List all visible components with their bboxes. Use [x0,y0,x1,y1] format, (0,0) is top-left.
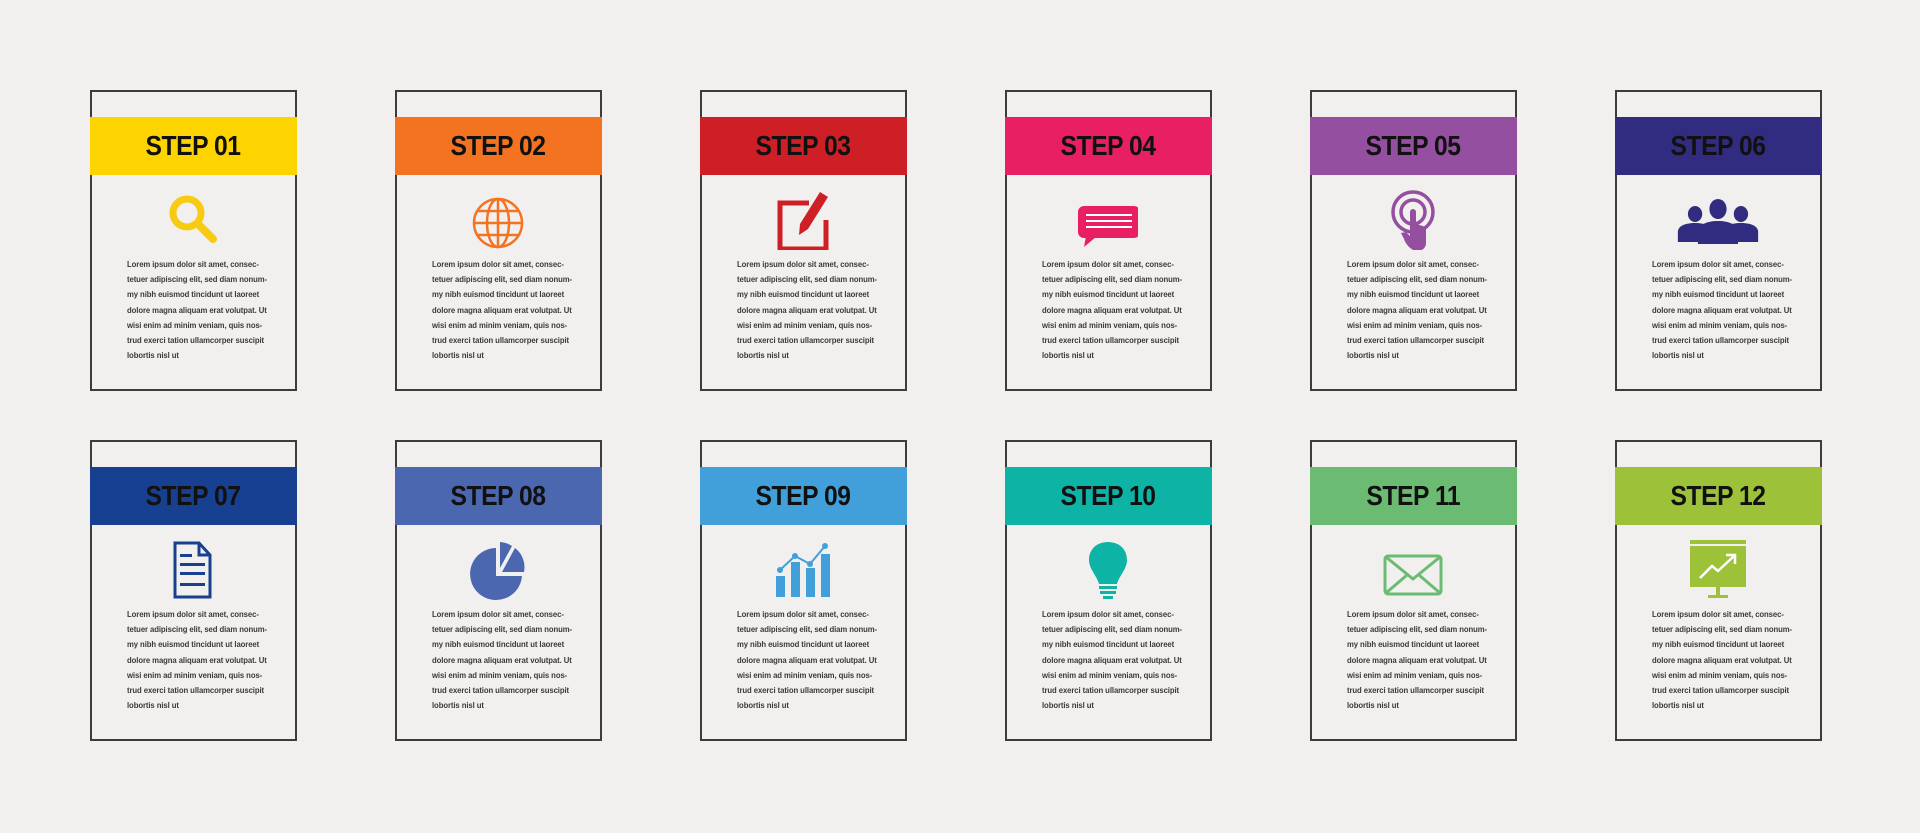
band: step 06 [1615,117,1822,175]
card: step 09 [700,440,907,741]
text block: my nibh euismod tincidunt ut laoreet [127,639,259,649]
text block: trud exerci tation ullamcorper suscipit [737,335,874,345]
text block: dolore magna aliquam erat volutpat. Ut [737,305,877,315]
card: step 03 [700,90,907,391]
icon: globe [472,198,524,248]
band: step 12: STEP 12 [1671,480,1766,511]
icon: bar chart [776,543,830,597]
card: step 08 [395,440,602,741]
band: step 12 [1615,467,1822,525]
text block: dolore magna aliquam erat volutpat. Ut [127,305,267,315]
text block: dolore magna aliquam erat volutpat. Ut [1347,305,1487,315]
text block: trud exerci tation ullamcorper suscipit [1042,685,1179,695]
text block: Lorem ipsum dolor sit amet, consec- [127,259,259,269]
band: step 01: STEP 01 [146,130,241,161]
text block: Lorem ipsum dolor sit amet, consec- [432,259,564,269]
text block: Lorem ipsum dolor sit amet, consec- [737,259,869,269]
text block: my nibh euismod tincidunt ut laoreet [1652,639,1784,649]
text block: lobortis nisl ut [127,350,179,360]
card: step 05 [1310,90,1517,391]
text block: lobortis nisl ut [1042,350,1094,360]
text block: dolore magna aliquam erat volutpat. Ut [1652,655,1792,665]
icon: touch [1391,190,1435,250]
text block: trud exerci tation ullamcorper suscipit [1347,335,1484,345]
text block: my nibh euismod tincidunt ut laoreet [432,639,564,649]
card: step 01 [90,90,297,391]
band: step 07: STEP 07 [146,480,241,511]
band: step 09 [700,467,907,525]
text block: my nibh euismod tincidunt ut laoreet [127,289,259,299]
text block: Lorem ipsum dolor sit amet, consec- [127,609,259,619]
text block: dolore magna aliquam erat volutpat. Ut [1042,655,1182,665]
card: step 11 [1310,440,1517,741]
text block: trud exerci tation ullamcorper suscipit [127,335,264,345]
text block: wisi enim ad minim veniam, quis nos- [127,670,262,680]
text block: wisi enim ad minim veniam, quis nos- [1042,320,1177,330]
text block: my nibh euismod tincidunt ut laoreet [432,289,564,299]
text block: wisi enim ad minim veniam, quis nos- [432,320,567,330]
text block: trud exerci tation ullamcorper suscipit [737,685,874,695]
band: step 02 [395,117,602,175]
icon: pie chart [470,542,524,600]
text block: Lorem ipsum dolor sit amet, consec- [1042,609,1174,619]
text block: lobortis nisl ut [1652,350,1704,360]
text block: Lorem ipsum dolor sit amet, consec- [1042,259,1174,269]
band: step 06: STEP 06 [1671,130,1766,161]
band: step 03: STEP 03 [756,130,851,161]
band: step 10: STEP 10 [1061,480,1156,511]
text block [1347,609,1487,710]
text block [432,609,572,710]
text block: Lorem ipsum dolor sit amet, consec- [1347,609,1479,619]
text block: Lorem ipsum dolor sit amet, consec- [737,609,869,619]
text block: lobortis nisl ut [1042,700,1094,710]
text block: tetuer adipiscing elit, sed diam nonum- [432,624,572,634]
text block [1042,609,1182,710]
text block [1042,259,1182,360]
text block: Lorem ipsum dolor sit amet, consec- [1652,609,1784,619]
text block: my nibh euismod tincidunt ut laoreet [1347,289,1479,299]
text block: wisi enim ad minim veniam, quis nos- [127,320,262,330]
text block: tetuer adipiscing elit, sed diam nonum- [737,274,877,284]
text block: lobortis nisl ut [1652,700,1704,710]
band: step 08: STEP 08 [451,480,546,511]
text block: lobortis nisl ut [127,700,179,710]
text block [127,609,267,710]
text block: my nibh euismod tincidunt ut laoreet [1652,289,1784,299]
text block: lobortis nisl ut [737,350,789,360]
card: step 10 [1005,440,1212,741]
text block [737,609,877,710]
text block: tetuer adipiscing elit, sed diam nonum- [1652,274,1792,284]
text block: Lorem ipsum dolor sit amet, consec- [1347,259,1479,269]
text block: wisi enim ad minim veniam, quis nos- [1652,320,1787,330]
band: step 09: STEP 09 [756,480,851,511]
band: step 02: STEP 02 [451,130,546,161]
text block: trud exerci tation ullamcorper suscipit [1652,685,1789,695]
text block: tetuer adipiscing elit, sed diam nonum- [1042,274,1182,284]
text block: wisi enim ad minim veniam, quis nos- [432,670,567,680]
band: step 03 [700,117,907,175]
text block: trud exerci tation ullamcorper suscipit [127,685,264,695]
text block [1652,609,1792,710]
text block: dolore magna aliquam erat volutpat. Ut [737,655,877,665]
card: step 07 [90,440,297,741]
text block: my nibh euismod tincidunt ut laoreet [1347,639,1479,649]
band: step 05: STEP 05 [1366,130,1461,161]
text block: lobortis nisl ut [432,350,484,360]
text block: dolore magna aliquam erat volutpat. Ut [1042,305,1182,315]
band: step 11: STEP 11 [1367,480,1460,511]
band: step 05 [1310,117,1517,175]
text block: tetuer adipiscing elit, sed diam nonum- [1347,624,1487,634]
text block: my nibh euismod tincidunt ut laoreet [737,639,869,649]
text block: my nibh euismod tincidunt ut laoreet [1042,289,1174,299]
text block: dolore magna aliquam erat volutpat. Ut [1347,655,1487,665]
text block: trud exerci tation ullamcorper suscipit [1042,335,1179,345]
text block: tetuer adipiscing elit, sed diam nonum- [127,624,267,634]
text block: tetuer adipiscing elit, sed diam nonum- [1347,274,1487,284]
text block [127,259,267,360]
text block: dolore magna aliquam erat volutpat. Ut [1652,305,1792,315]
text block: wisi enim ad minim veniam, quis nos- [737,670,872,680]
text block: trud exerci tation ullamcorper suscipit [432,335,569,345]
text block: trud exerci tation ullamcorper suscipit [432,685,569,695]
band: step 04: STEP 04 [1061,130,1156,161]
band: step 08 [395,467,602,525]
text block: my nibh euismod tincidunt ut laoreet [737,289,869,299]
text block: trud exerci tation ullamcorper suscipit [1652,335,1789,345]
text block: dolore magna aliquam erat volutpat. Ut [432,305,572,315]
text block: tetuer adipiscing elit, sed diam nonum- [432,274,572,284]
text block: wisi enim ad minim veniam, quis nos- [1042,670,1177,680]
text block: Lorem ipsum dolor sit amet, consec- [1652,259,1784,269]
icon: presentation board [1690,540,1746,598]
text block: dolore magna aliquam erat volutpat. Ut [432,655,572,665]
icon: team [1678,199,1758,244]
band: step 10 [1005,467,1212,525]
text block: my nibh euismod tincidunt ut laoreet [1042,639,1174,649]
text block: lobortis nisl ut [737,700,789,710]
text block [1347,259,1487,360]
band: step 07 [90,467,297,525]
text block: tetuer adipiscing elit, sed diam nonum- [1652,624,1792,634]
text block: tetuer adipiscing elit, sed diam nonum- [127,274,267,284]
card: step 04 [1005,90,1212,391]
text block [737,259,877,360]
band: step 04 [1005,117,1212,175]
text block: trud exerci tation ullamcorper suscipit [1347,685,1484,695]
text block [1652,259,1792,360]
text block: wisi enim ad minim veniam, quis nos- [737,320,872,330]
icon: light bulb [1089,542,1127,599]
text block: Lorem ipsum dolor sit amet, consec- [432,609,564,619]
text block: tetuer adipiscing elit, sed diam nonum- [1042,624,1182,634]
card: step 12 [1615,440,1822,741]
text block: wisi enim ad minim veniam, quis nos- [1347,320,1482,330]
icon: magnifier [170,196,217,243]
text block: lobortis nisl ut [1347,700,1399,710]
icon: speech bubble [1078,206,1138,247]
card: step 06 [1615,90,1822,391]
text block: lobortis nisl ut [1347,350,1399,360]
text block: lobortis nisl ut [432,700,484,710]
band: step 01 [90,117,297,175]
text block: tetuer adipiscing elit, sed diam nonum- [737,624,877,634]
icon: envelope [1384,554,1442,596]
text block: dolore magna aliquam erat volutpat. Ut [127,655,267,665]
band: step 11 [1310,467,1517,525]
icon: edit [778,192,828,250]
text block: wisi enim ad minim veniam, quis nos- [1652,670,1787,680]
text block [432,259,572,360]
text block: wisi enim ad minim veniam, quis nos- [1347,670,1482,680]
card: step 02 [395,90,602,391]
icon: document [174,542,212,598]
